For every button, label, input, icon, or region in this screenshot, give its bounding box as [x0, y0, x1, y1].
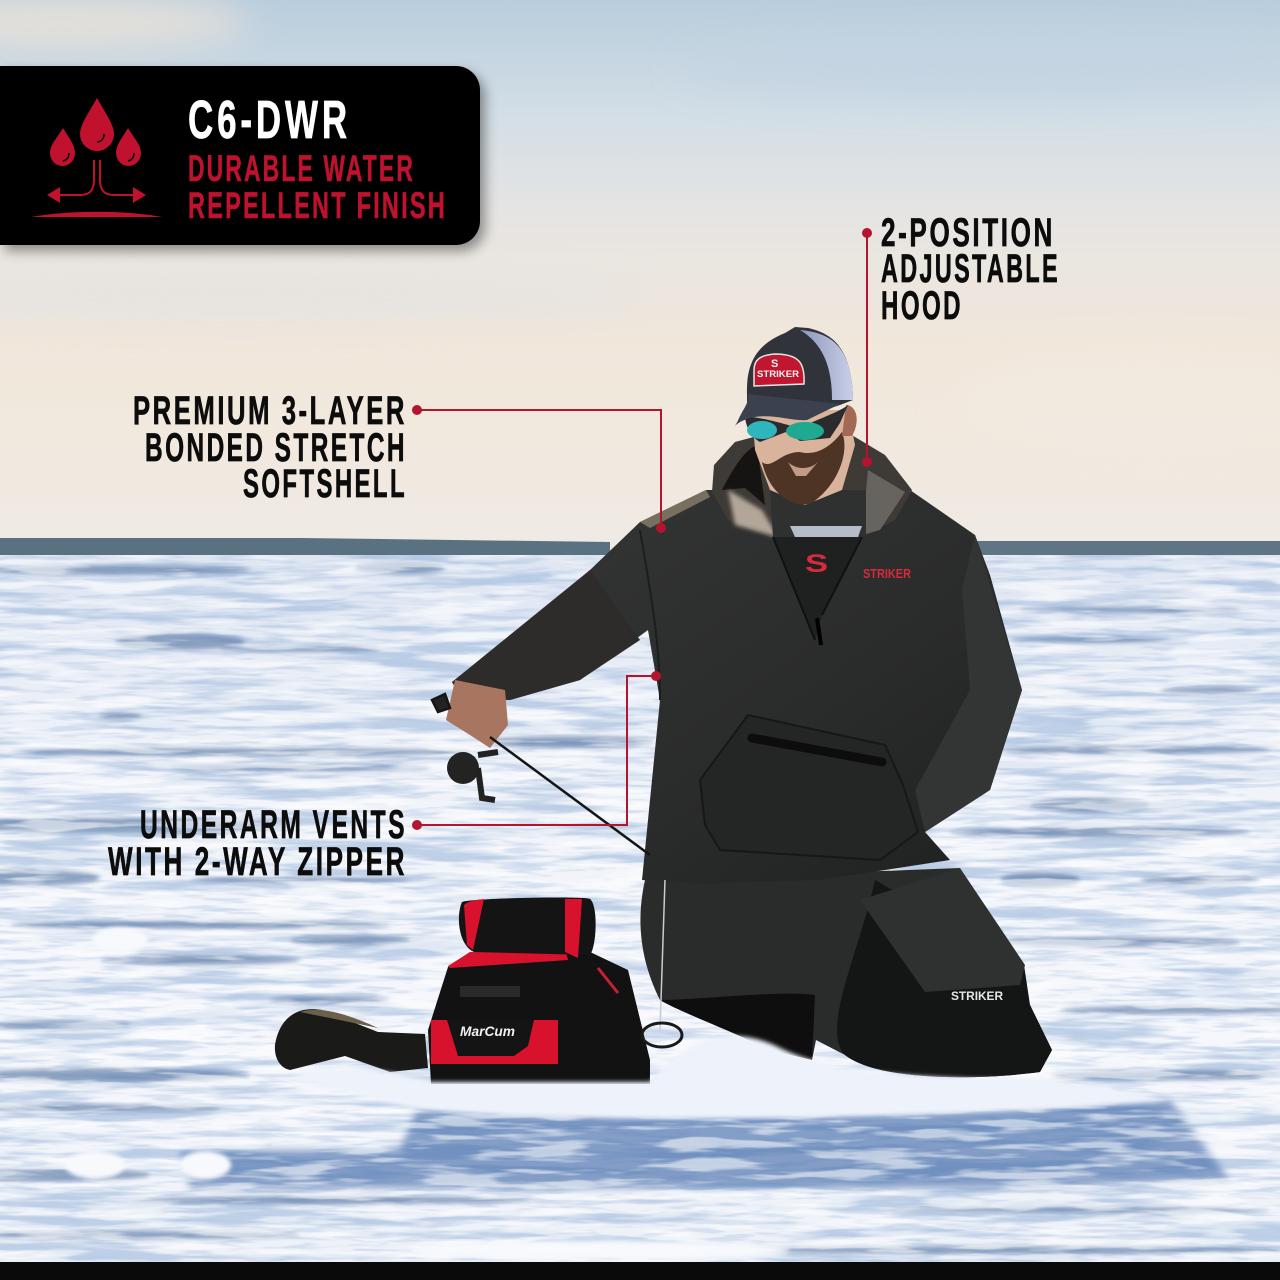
snow shadow in foreground — [180, 1094, 1230, 1188]
angler: STRIKER — [757, 369, 800, 379]
foreground snow mound — [290, 1036, 1170, 1119]
angler — [432, 327, 1052, 1077]
callout: underarm vents: UNDERARM VENTS — [140, 803, 407, 847]
badge subtitle: REPELLENT FINISH — [188, 185, 447, 226]
badge panel — [0, 66, 480, 245]
angler: S — [805, 550, 828, 578]
callout: underarm vents — [108, 671, 661, 884]
callout: 2-position adjustable hood — [862, 211, 1060, 467]
cap brim — [737, 394, 840, 424]
angler: STRIKER — [863, 567, 911, 581]
pants — [640, 868, 1052, 1077]
badge subtitle: DURABLE WATER — [188, 148, 415, 189]
angler: S — [771, 358, 778, 370]
callout: 2-position adjustable hood: 2-POSITION — [881, 211, 1055, 255]
callout: premium softshell — [133, 389, 666, 533]
photo background: snow field — [0, 555, 1280, 1262]
badge title: C6-DWR — [188, 90, 351, 150]
callout: 2-position adjustable hood: ADJUSTABLE — [881, 247, 1060, 291]
fabric pouch on snow — [275, 1009, 428, 1072]
chest zip panel — [773, 537, 862, 640]
bottom black strip — [0, 1262, 1280, 1280]
rolled mat — [459, 898, 596, 955]
photo background: sky — [0, 0, 1280, 560]
hood — [712, 434, 912, 538]
fishing gear: rolled mat and bag — [275, 898, 650, 1084]
cap — [735, 327, 853, 426]
shirt and neck — [770, 490, 866, 537]
callout: underarm vents: WITH 2-WAY ZIPPER — [108, 840, 407, 884]
reel and rod — [432, 694, 650, 855]
callout: premium softshell: BONDED STRETCH — [145, 426, 407, 470]
hoodie body — [452, 490, 1022, 884]
kangaroo pocket — [700, 715, 918, 860]
bag logo: MarCum — [460, 1023, 515, 1039]
badge subtitle — [188, 148, 447, 226]
angler: STRIKER — [951, 989, 1003, 1003]
callout: premium softshell: PREMIUM 3-LAYER — [133, 389, 407, 433]
sunglasses — [745, 405, 848, 442]
callout: 2-position adjustable hood: HOOD — [881, 284, 963, 328]
badge: C6-DWR — [0, 66, 480, 245]
cap patch — [754, 354, 804, 386]
head — [752, 410, 855, 505]
icon: water drops repelled — [31, 98, 162, 217]
callout: premium softshell: SOFTSHELL — [243, 462, 407, 506]
photo background: distant shoreline — [0, 538, 1280, 559]
hand — [446, 680, 508, 748]
bag body — [428, 952, 650, 1084]
fishing line and coil — [660, 880, 665, 1030]
